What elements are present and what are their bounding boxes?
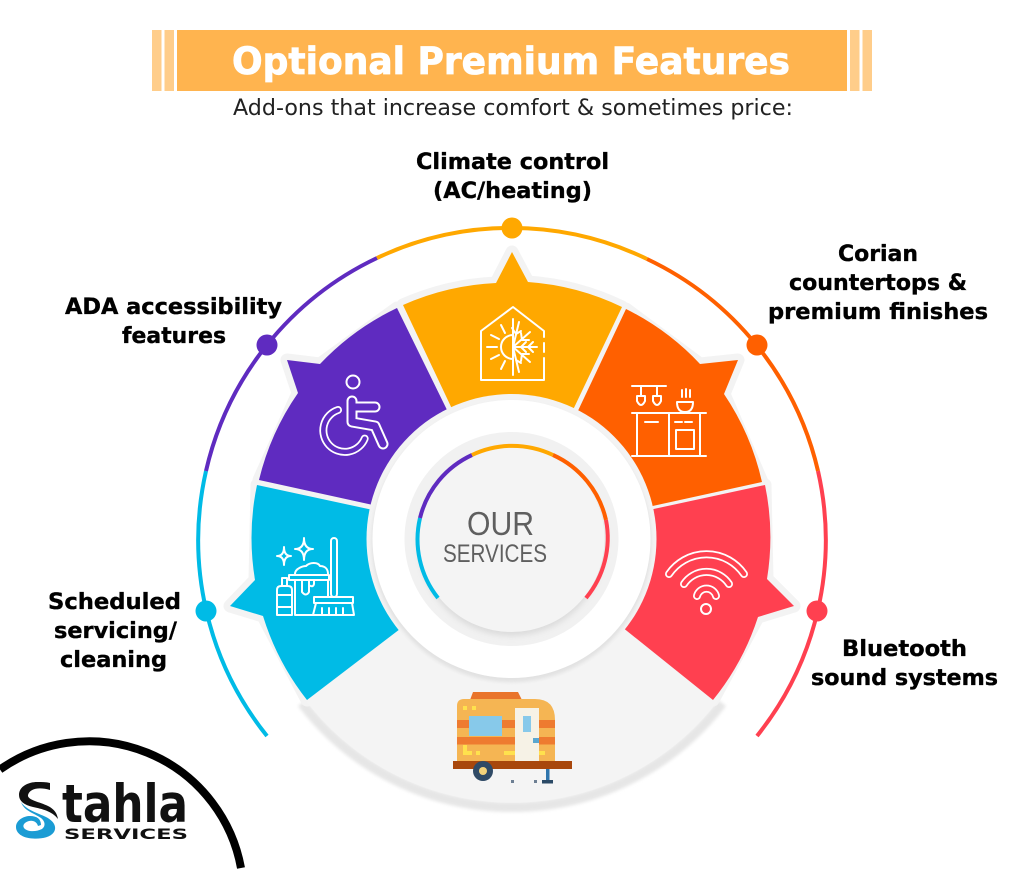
label: climate control: Climate control: [416, 150, 609, 175]
center label: [443, 505, 547, 568]
wedge: ADA accessibility: [259, 308, 448, 505]
icon: climate house: [481, 307, 544, 380]
label: scheduled servicing: cleaning: [60, 648, 167, 673]
title banner: Optional Premium Features: [232, 40, 790, 83]
wheel bottom shadow: [302, 703, 722, 807]
wedge halo: [230, 252, 794, 700]
label: corian countertops: countertops &: [789, 271, 967, 296]
logo S mark: [16, 782, 58, 839]
wedge: climate control: [403, 252, 622, 412]
label: scheduled servicing: [48, 590, 181, 673]
label: bluetooth: sound systems: [811, 666, 998, 691]
label: climate control: [416, 150, 609, 204]
service wheel: [230, 252, 794, 807]
label: ADA accessibility: [65, 295, 282, 349]
inner colored arc: [418, 446, 608, 598]
icon: camper trailer: [453, 692, 572, 784]
wedge: sound: [622, 485, 794, 700]
wedge: cleaning: [230, 485, 400, 700]
label: scheduled servicing: Scheduled: [48, 590, 181, 615]
label: bluetooth: [811, 637, 998, 691]
label: corian countertops: premium finishes: [768, 300, 988, 325]
icon: kitchen: [632, 386, 706, 456]
title banner: [152, 30, 872, 91]
icon: wifi: [669, 554, 744, 614]
icon: wheelchair: [323, 376, 383, 452]
logo services: SERVICES: [64, 827, 188, 843]
label: scheduled servicing: servicing/: [54, 619, 178, 644]
subtitle: Add-ons that increase comfort & sometimes price:: [233, 96, 793, 121]
label: corian countertops: Corian: [838, 242, 918, 267]
logo wordmark: tahla: [62, 774, 188, 835]
label: ADA accessibility: ADA accessibility: [65, 295, 282, 320]
label: corian countertops: [768, 242, 988, 325]
logo badge: [0, 741, 241, 868]
label: climate control: (AC/heating): [433, 179, 592, 204]
center ring: [366, 394, 656, 684]
icon: cleaning supplies: [277, 538, 354, 615]
bottom gray sector: [304, 620, 720, 803]
center label: OUR: [467, 505, 534, 542]
outer timeline arc with dots: [196, 218, 828, 736]
label: ADA accessibility: features: [122, 324, 226, 349]
label: bluetooth: Bluetooth: [842, 637, 967, 662]
center label: SERVICES: [443, 540, 547, 568]
wedge: countertops: [576, 309, 762, 507]
